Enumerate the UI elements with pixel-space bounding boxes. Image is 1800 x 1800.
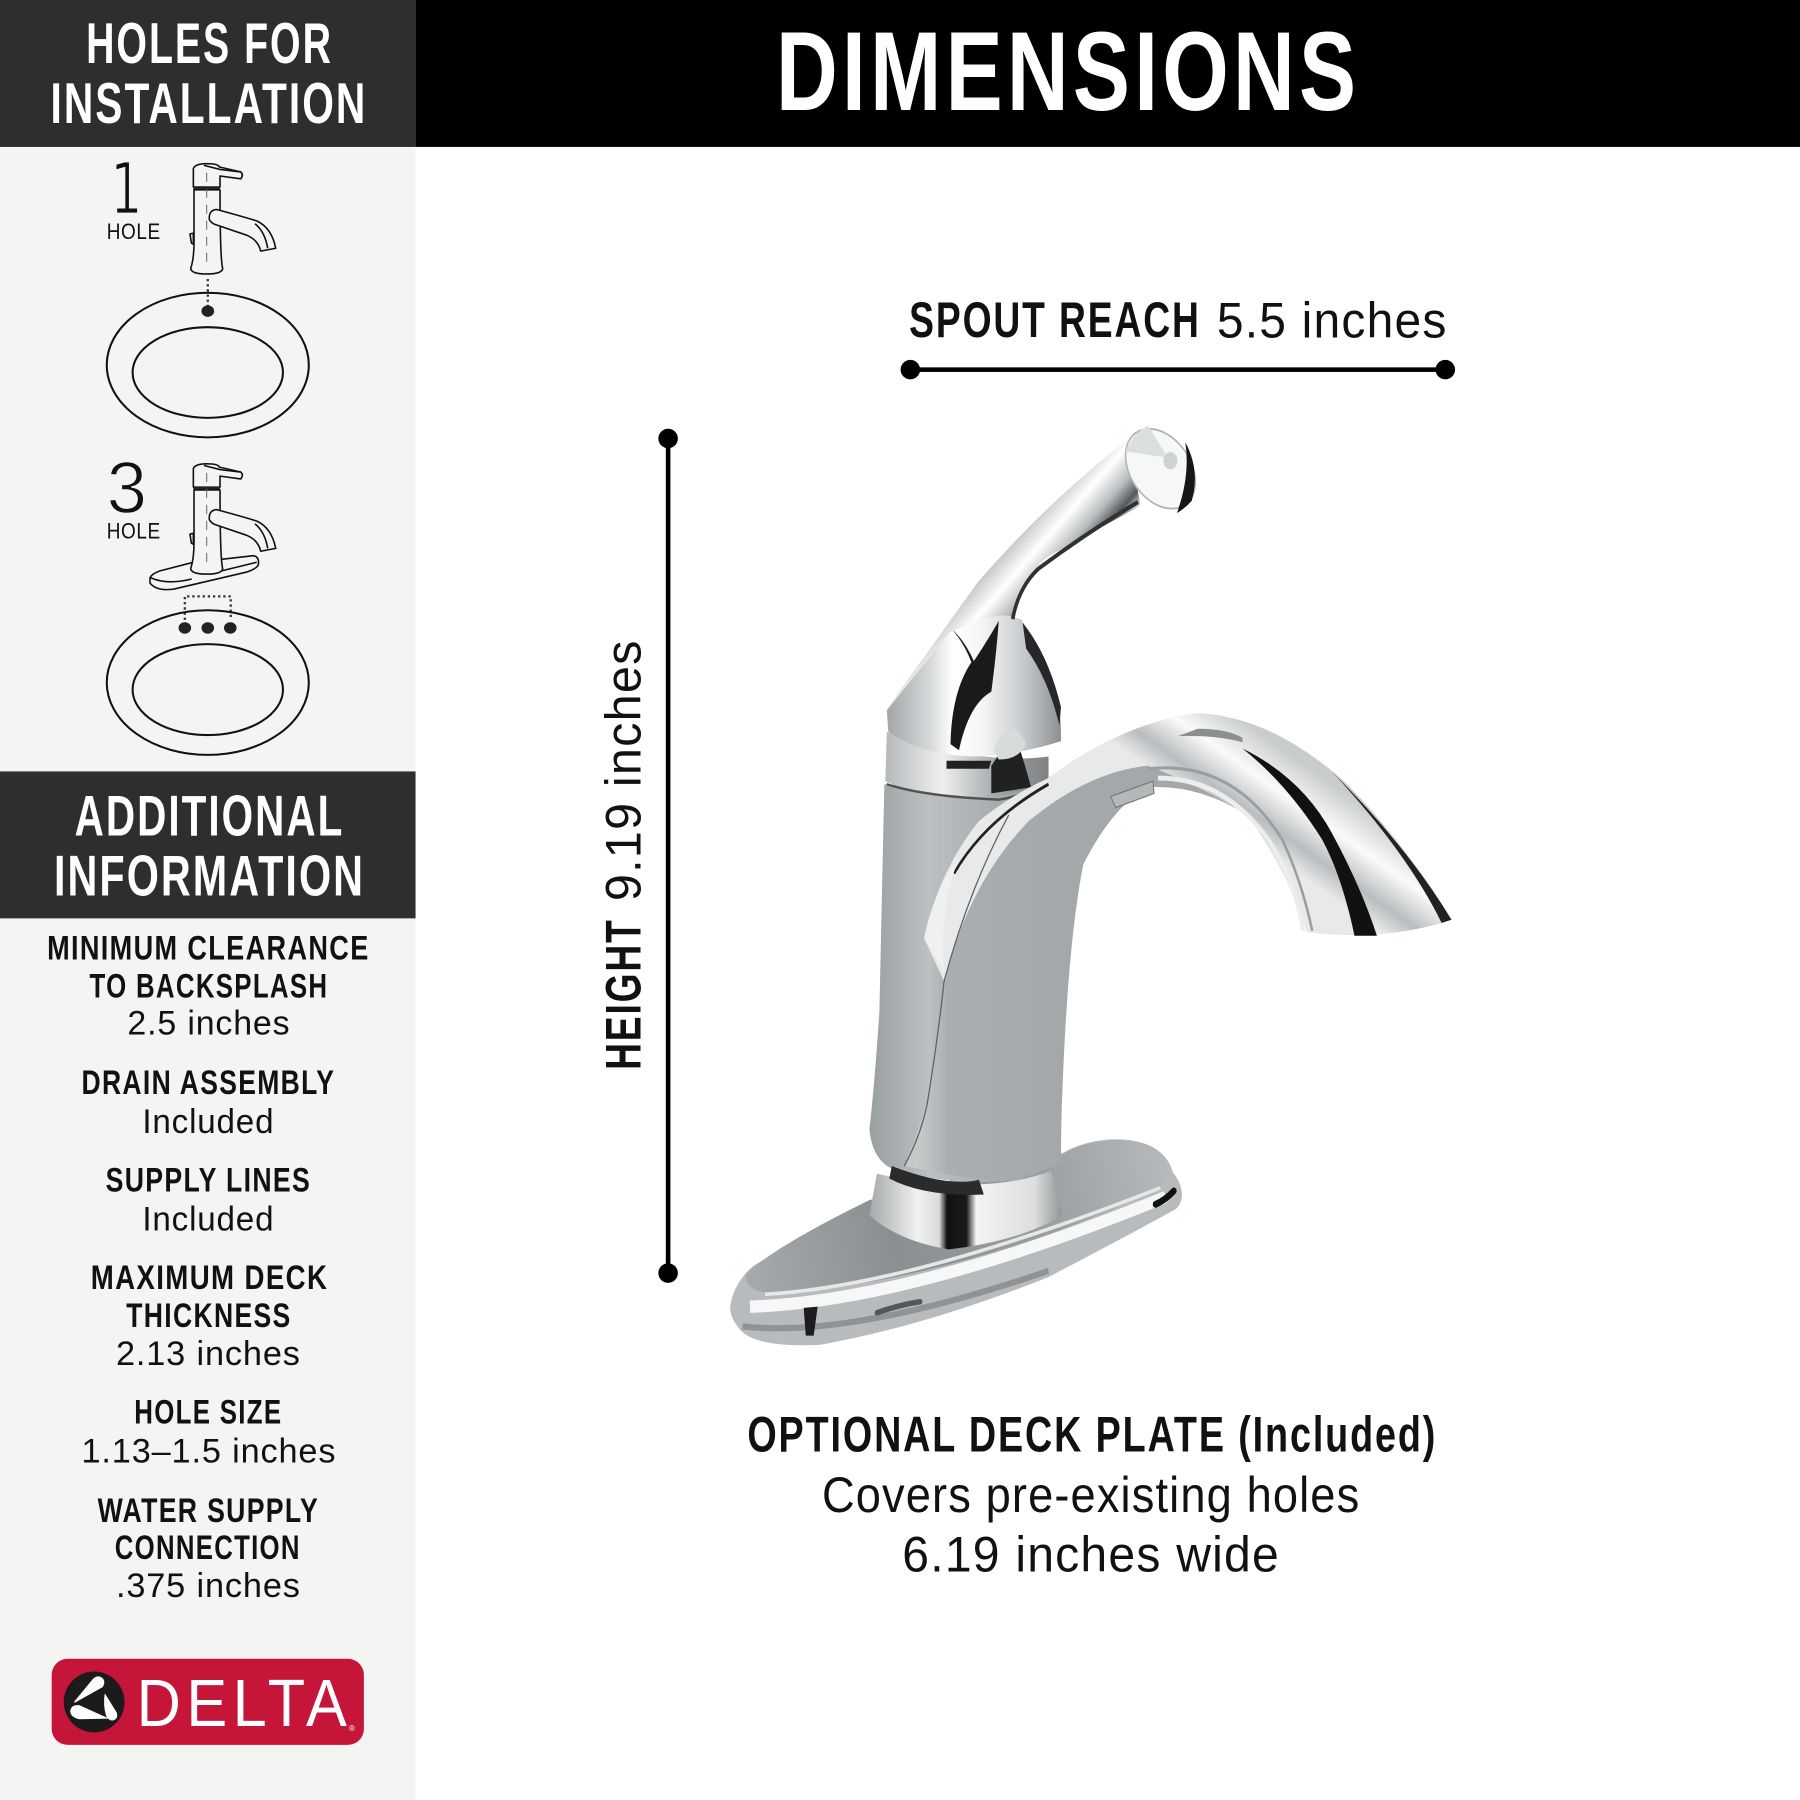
label: 3 hole — [107, 446, 161, 543]
spec: hole size: 1.13–1.5 inches — [82, 1433, 336, 1471]
heading: holes for installation: INSTALLATION — [51, 72, 367, 136]
spec: water supply connection: WATER SUPPLY — [98, 1492, 319, 1530]
caption: optional deck plate: OPTIONAL DECK PLATE (Included) — [747, 1406, 1437, 1463]
logo: delta: ® — [349, 1724, 355, 1733]
label: height: 9.19 inches — [595, 639, 652, 901]
faucet illustration — [730, 412, 1452, 1345]
panel: left sidebar — [0, 0, 416, 1800]
spec: maximum deck thickness: 2.13 inches — [116, 1335, 301, 1373]
heading: holes for installation: HOLES FOR — [86, 12, 333, 76]
heading: holes for installation — [0, 0, 416, 147]
spec: supply lines — [106, 1162, 311, 1239]
heading: additional information: ADDITIONAL — [75, 785, 344, 849]
spec: drain assembly: Included — [142, 1103, 274, 1141]
label: 1 hole: 1 — [110, 148, 142, 231]
title: dimensions: DIMENSIONS — [776, 8, 1360, 134]
caption: optional deck plate: Covers pre-existing holes — [822, 1466, 1360, 1523]
dotted guide: three holes — [185, 596, 231, 620]
label: height — [595, 639, 652, 1070]
icon: sink with one hole — [107, 293, 309, 437]
spec: hole size — [82, 1393, 336, 1470]
spout and front column — [904, 713, 1452, 1180]
dark ring at body foot — [889, 1166, 984, 1195]
logo: delta: DELTA — [137, 1667, 352, 1741]
heading: additional information — [0, 771, 416, 918]
spec: supply lines: Included — [142, 1201, 274, 1239]
lever handle — [887, 412, 1208, 710]
spec: drain assembly — [82, 1064, 335, 1141]
icon: sink with three holes — [107, 610, 309, 755]
spec: minimum clearance: TO BACKSPLASH — [90, 968, 328, 1006]
spec: water supply connection — [98, 1492, 319, 1605]
spec: water supply connection: CONNECTION — [115, 1529, 301, 1567]
spec: minimum clearance — [47, 930, 370, 1042]
faucet base collar — [869, 1171, 1062, 1249]
logo: delta — [52, 1659, 364, 1745]
caption: optional deck plate — [747, 1406, 1437, 1583]
label: spout reach: SPOUT REACH — [909, 291, 1201, 348]
label: spout reach: 5.5 inches — [1217, 291, 1448, 348]
spec: maximum deck thickness: THICKNESS — [126, 1297, 292, 1335]
deck plate — [730, 1139, 1182, 1345]
label: height: HEIGHT — [595, 918, 652, 1070]
caption: optional deck plate: 6.19 inches wide — [902, 1526, 1280, 1583]
valve collar — [885, 723, 1049, 800]
spec: minimum clearance: 2.5 inches — [127, 1004, 290, 1042]
label: 3 hole: 3 — [107, 446, 147, 529]
spec: water supply connection: .375 inches — [116, 1567, 301, 1605]
label: 3 hole: HOLE — [107, 518, 161, 543]
faucet body — [869, 784, 1063, 1182]
icon: three-hole faucet with deck plate — [150, 464, 276, 590]
heading: additional information: INFORMATION — [54, 844, 365, 908]
spec: maximum deck thickness — [91, 1259, 328, 1373]
dimension line: height — [658, 429, 678, 1283]
spec: maximum deck thickness: MAXIMUM DECK — [91, 1259, 328, 1297]
dotted guide: single hole — [207, 279, 209, 307]
valve dome — [887, 606, 1061, 760]
icon: single-hole faucet — [190, 164, 276, 274]
spec: minimum clearance: MINIMUM CLEARANCE — [47, 930, 370, 968]
label: 1 hole: HOLE — [107, 219, 161, 244]
spec: hole size: HOLE SIZE — [134, 1393, 282, 1431]
spec: supply lines: SUPPLY LINES — [106, 1162, 311, 1200]
spec: drain assembly: DRAIN ASSEMBLY — [82, 1064, 335, 1102]
top banner: dimensions — [416, 0, 1800, 147]
dimension line: spout reach — [901, 360, 1455, 379]
